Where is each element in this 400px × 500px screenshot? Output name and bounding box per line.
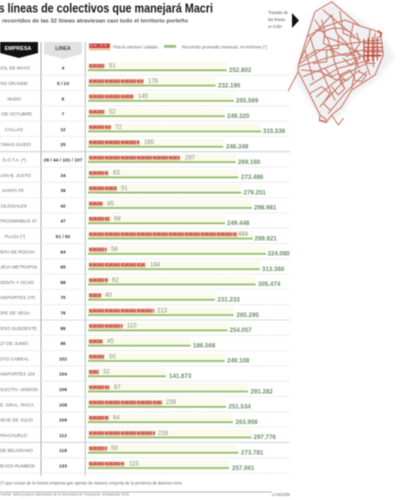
row: Transportes 104	[0, 368, 290, 381]
row: 9 de Octubre: 52	[109, 110, 116, 116]
row: Riachuelo: 112	[59, 433, 67, 439]
row: Agto Cabral: 50	[109, 354, 116, 360]
row: Callao: 315.536	[263, 128, 286, 135]
row: 27 de Junio: 96	[60, 341, 66, 347]
row: Benita de Rocha: 64	[60, 249, 66, 255]
row: Sesenta y Ocho: 68	[60, 280, 66, 286]
row: Tomas Guido: 165	[144, 140, 155, 146]
row: Tomas Guido	[0, 138, 290, 152]
row: Transportes 270: 231.233	[218, 296, 240, 304]
row: Troomnibus 47: 68	[114, 217, 121, 223]
row: D.O.T.A.: 28 / 44 / 101 / 107	[44, 158, 83, 164]
row: Transportes 104: 32	[103, 370, 110, 376]
row: Rio Grande: 232.190	[218, 82, 241, 89]
row: Nudo: NUDO	[7, 96, 21, 101]
row: Santa Fe: 91	[121, 186, 128, 192]
row: Tomas Guido: 246.349	[226, 144, 249, 150]
row: Tomas Guido: 25	[60, 142, 66, 148]
row: Colegiales: 45	[107, 201, 114, 207]
row: Juan B. Justo: 273.486	[241, 174, 264, 181]
source line: Fuente: datos propios elaborados de la Secretaría de Transporte. Actualizado 2015	[0, 492, 130, 496]
row: Transportes 104: 104	[59, 372, 67, 378]
row: Santa Fe	[0, 184, 290, 198]
legend: flota: Flota de colectivos / unidades	[113, 44, 159, 50]
row: Rio Grande: 5 / 23	[57, 81, 69, 87]
row: Troomnibus 47	[0, 215, 290, 228]
row: 9 de Octubre: 7	[62, 112, 65, 118]
row: 27 de Junio: 186.568	[193, 342, 216, 349]
row: Sesenta y Ocho: 62	[112, 278, 119, 284]
row: De Belgrano: 273.781	[241, 450, 264, 456]
row: Juan B. Justo: 34	[60, 173, 66, 179]
row: Colectiv. Unidos	[0, 383, 290, 396]
row: De Belgrano: DE BELGRANO	[0, 448, 33, 453]
row: Riachuelo: RIACHUELO	[0, 433, 27, 438]
row: Sol de Mayo: 252.802	[229, 67, 252, 74]
row: Transportes 270: 40	[105, 293, 112, 299]
row: Nudo: 145	[138, 94, 149, 100]
row: Nueve de Julio: 64	[113, 416, 120, 422]
header: empresa: EMPRESA	[5, 46, 31, 52]
row: Plaza: 484	[238, 232, 249, 238]
row: Santa Fe: 39	[60, 188, 66, 194]
row: Troomnibus 47: 249.448	[227, 220, 250, 227]
row: Callao: CALLAO	[5, 127, 23, 132]
row: Agto Cabral: 102	[59, 356, 67, 362]
row: De Belgrano	[0, 444, 290, 458]
row: Gral. Roca	[0, 399, 290, 412]
row: Sol de Mayo	[0, 62, 290, 75]
row: Sesenta y Ocho	[0, 276, 290, 289]
row: Sol de Mayo: 51	[109, 64, 116, 70]
row: Colectiv. Unidos: 67	[114, 385, 121, 391]
row: Expreso Sudoeste: 254.057	[230, 327, 252, 334]
row: Callao	[0, 123, 290, 136]
row: Colegiales	[0, 200, 290, 213]
row: Expreso Sudoeste	[0, 322, 290, 335]
row: Troomnibus 47: 47	[60, 219, 66, 225]
row: Nuevos Rumbos: 257.061	[232, 465, 255, 472]
row: 27 de Junio	[0, 337, 290, 351]
row: D.O.T.A.	[0, 154, 290, 167]
map label: en CABA	[268, 24, 282, 29]
row: Plaza: 61 / 62	[56, 234, 71, 240]
row: Colegiales: 298.981	[254, 205, 277, 212]
row: Nuevos Rumbos: 133	[59, 464, 67, 470]
row: Nueva Metropol: 65	[60, 265, 66, 271]
row: De Belgrano: 59	[111, 446, 118, 452]
row: Colectiv. Unidos: 106	[59, 387, 67, 393]
row: 27 de Junio: 27 DE JUNIO	[0, 341, 28, 346]
map label	[268, 10, 289, 29]
row: Lope de Vega	[0, 307, 290, 320]
row: 9 de Octubre	[0, 108, 290, 121]
row: Nueva Metropol: 313.360	[262, 266, 285, 273]
row: D.O.T.A.: D.O.T.A. (*)	[3, 158, 26, 162]
row: Nueva Metropol	[0, 261, 290, 274]
row: Transportes 270	[0, 292, 290, 305]
row: Nueva Metropol: 184	[150, 262, 161, 268]
column divider: empresa	[40, 42, 42, 476]
header: empresa	[0, 42, 38, 58]
row: Plaza: 299.921	[254, 235, 277, 242]
row: Lope de Vega: 76	[60, 310, 66, 316]
row: Transportes 104: 141.873	[169, 373, 192, 380]
row: Gral. Roca: E. GRAL. ROCA	[0, 402, 35, 407]
row: Benita de Rocha	[0, 246, 290, 259]
row: Colegiales: 42	[60, 203, 66, 209]
row: Riachuelo: 216	[158, 431, 169, 437]
row: Nudo	[0, 93, 290, 106]
row: Nudo: 265.569	[236, 98, 259, 105]
footnote: (*) que cruzan de la misma empresa que operan de manera conjunta de la provincia de Buenos Aires	[0, 480, 182, 486]
legend: recorrido: Recorrido promedio mensual, en km/mes (*)	[182, 44, 267, 50]
row: D.O.T.A.: 269.160	[238, 159, 261, 166]
row: Santa Fe: 279.251	[244, 189, 266, 196]
row: Callao: 12	[60, 127, 66, 133]
column divider: linea	[84, 42, 86, 476]
row: Agto Cabral: 249.108	[227, 358, 250, 365]
row: Rio Grande	[0, 77, 290, 90]
row: Nuevos Rumbos	[0, 460, 290, 473]
row: Lope de Vega: 265.295	[236, 312, 259, 319]
row: Nueve de Julio: 109	[59, 418, 67, 424]
row: Juan B. Justo: 63	[113, 171, 120, 177]
map label: Trazado de	[268, 10, 289, 15]
credit: LA NACION	[272, 492, 290, 497]
row: Gral. Roca: 239	[166, 400, 177, 406]
arrow: map pointer	[292, 13, 299, 28]
row: Expreso Sudoeste: 86	[60, 326, 66, 332]
row: 27 de Junio: 45	[107, 339, 114, 345]
row: D.O.T.A.: 297	[185, 155, 196, 161]
row: Sesenta y Ocho: 305.474	[258, 281, 281, 288]
legend: flota	[89, 44, 159, 50]
row: Agto Cabral	[0, 353, 290, 366]
row: Callao: 72	[115, 125, 122, 131]
row: De Belgrano: 118	[59, 448, 67, 454]
footer rule	[0, 491, 272, 493]
row: Nuevos Rumbos: 115	[129, 461, 139, 467]
row: Gral. Roca: 251.534	[228, 404, 251, 411]
row: Sol de Mayo: 4	[62, 66, 65, 72]
row: Santa Fe: SANTA FE	[2, 188, 24, 193]
row: Juan B. Justo	[0, 169, 290, 182]
row: Gral. Roca: 108	[59, 402, 67, 408]
row: Riachuelo	[0, 429, 290, 442]
row: Expreso Sudoeste: 110	[127, 324, 137, 330]
row: Riachuelo: 297.776	[254, 434, 276, 441]
row: Nudo: 6	[62, 96, 65, 102]
header: linea: LINEA	[55, 46, 71, 52]
row: Nueve de Julio	[0, 414, 290, 427]
row: Plaza	[0, 230, 290, 244]
row: Plaza: PLAZA (*)	[5, 234, 25, 239]
row: Benita de Rocha: 324.080	[268, 251, 290, 258]
map label: las lineas	[268, 17, 285, 22]
row: Rio Grande: 178	[148, 79, 159, 85]
header: linea	[44, 42, 82, 59]
row: Troomnibus 47: TROOMNIBUS 47	[0, 219, 37, 224]
row: Transportes 270: 70	[60, 295, 66, 301]
row: Lope de Vega: 213	[157, 308, 168, 314]
row: 9 de Octubre: 249.320	[227, 113, 250, 120]
map: bus routes	[288, 2, 395, 125]
row: Nueve de Julio: 263.956	[236, 419, 258, 426]
row: Benita de Rocha: 58	[111, 247, 118, 253]
row: Colectiv. Unidos: 291.282	[250, 388, 273, 395]
